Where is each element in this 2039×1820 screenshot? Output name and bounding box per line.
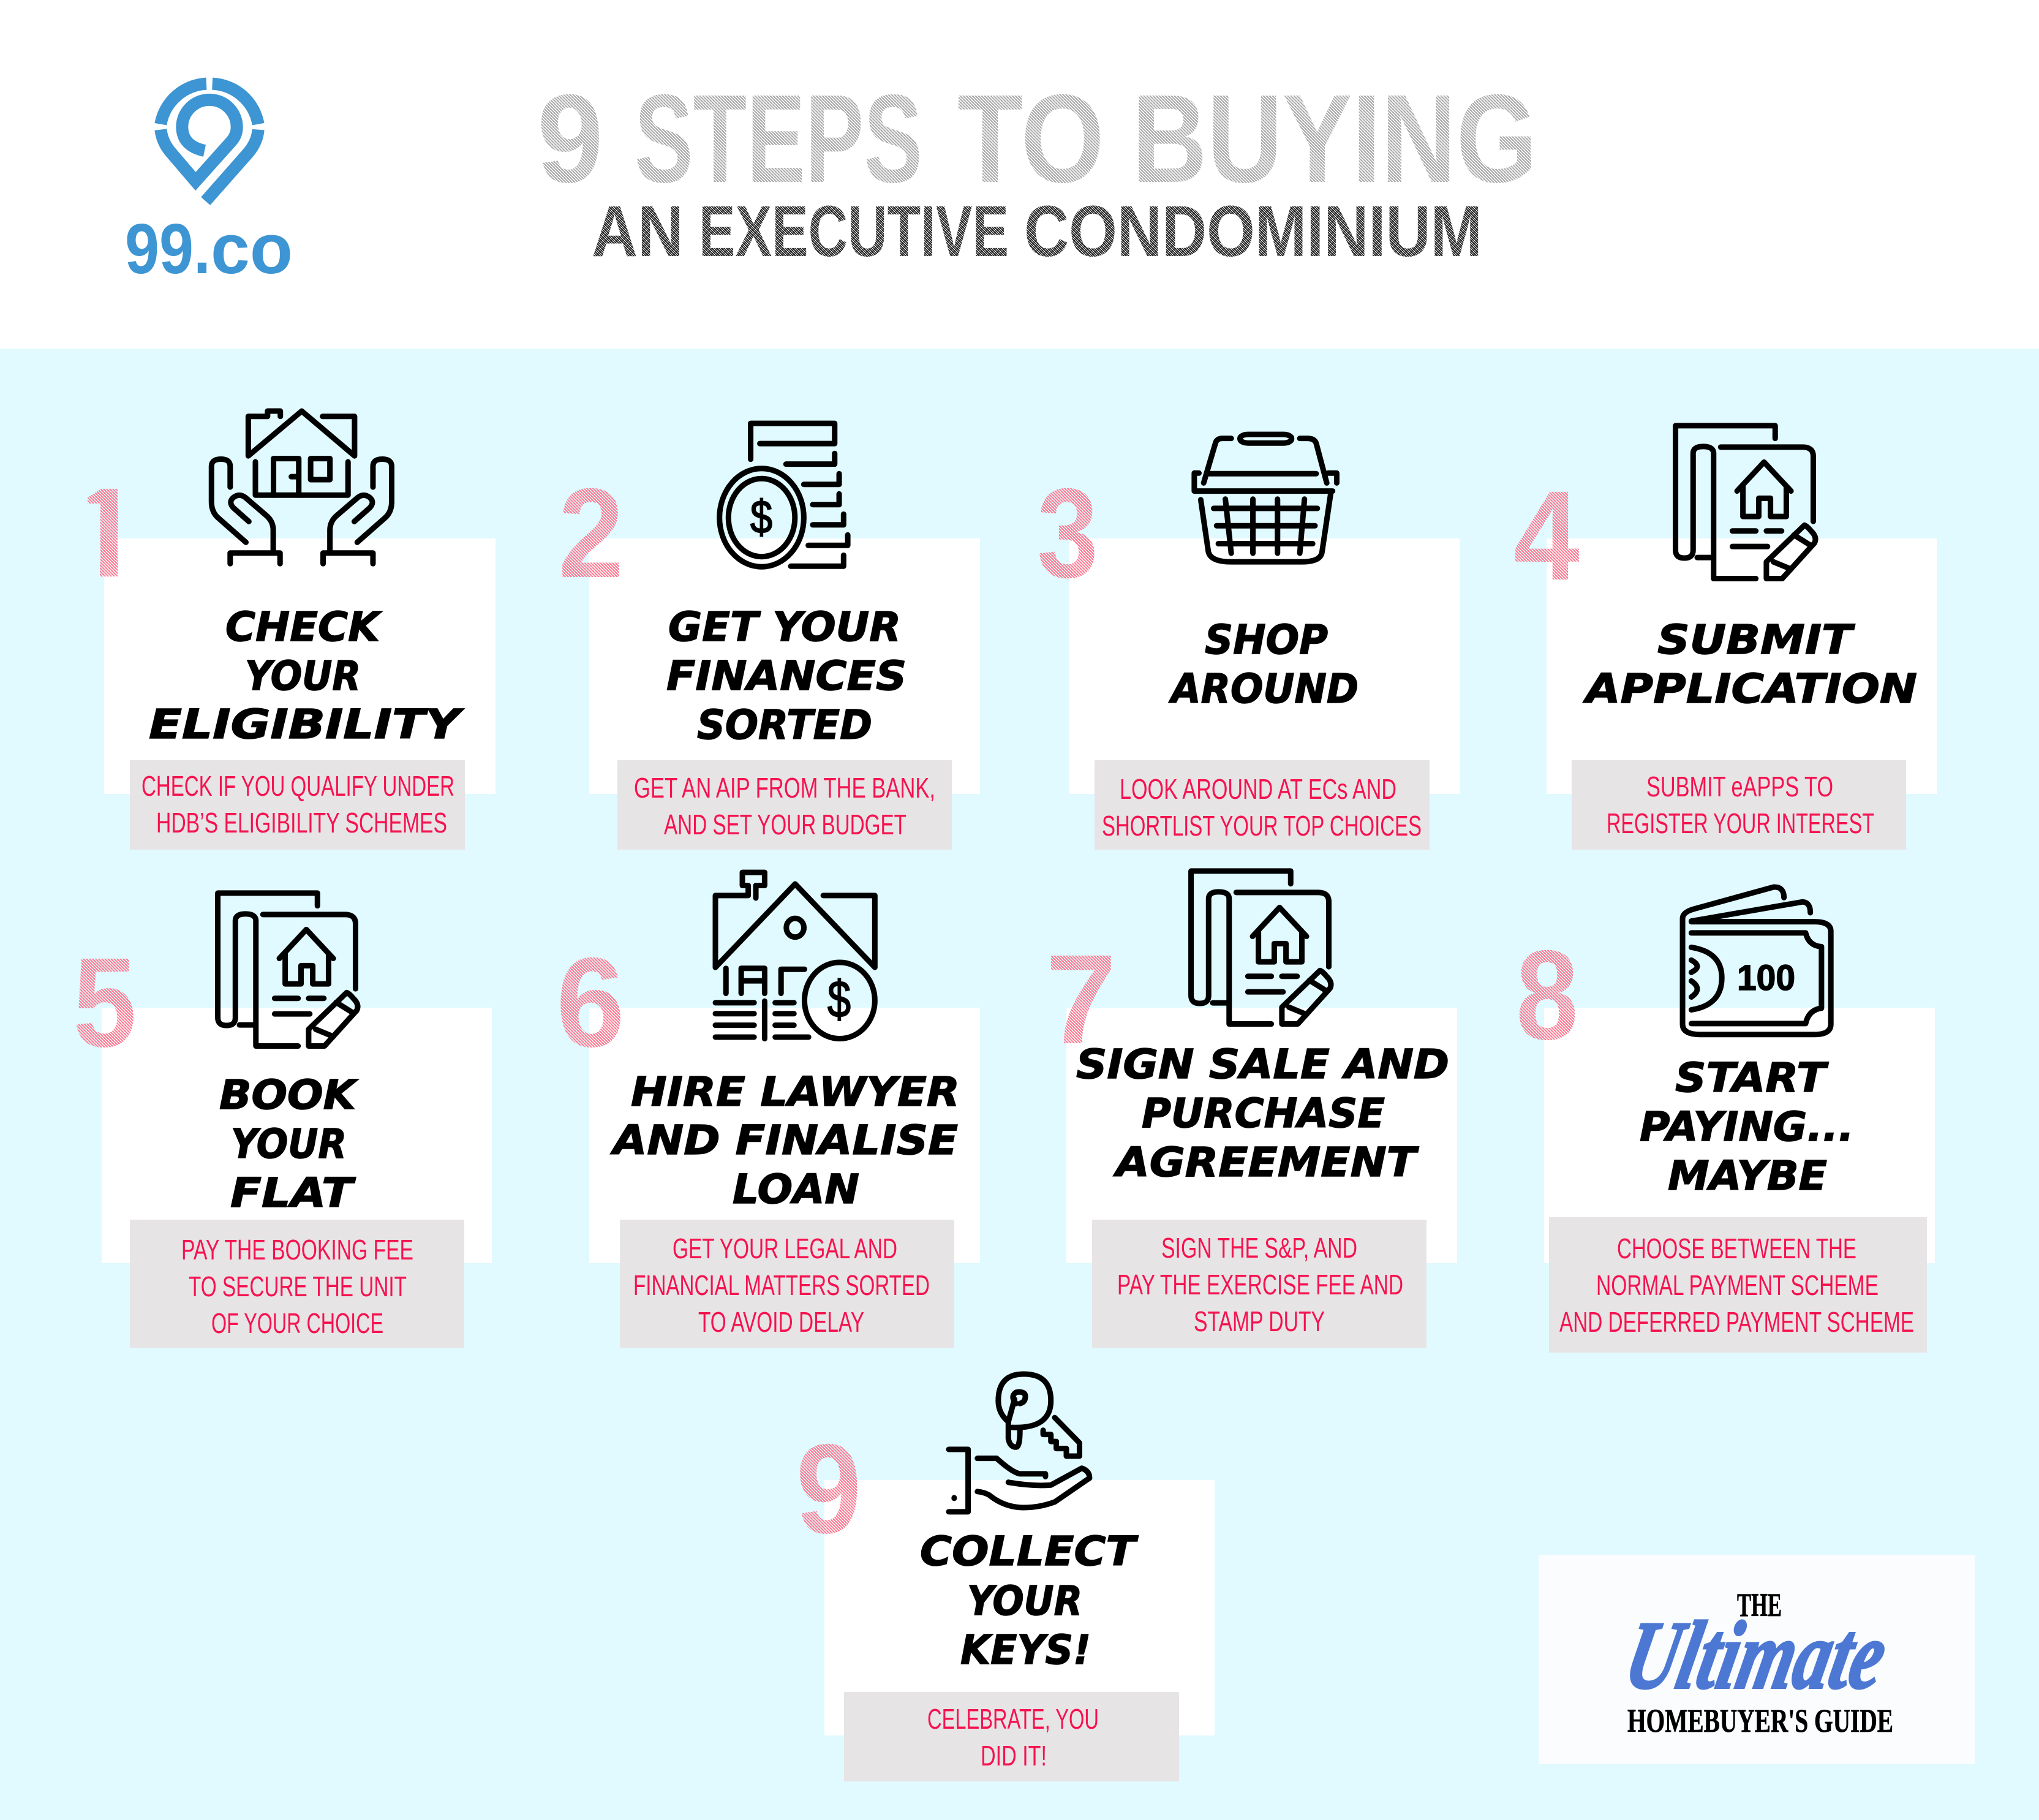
number 1: 1 <box>70 462 141 604</box>
title line 2 <box>592 191 1482 272</box>
title <box>537 69 1537 272</box>
heading <box>1640 1054 1854 1199</box>
heading <box>1582 616 1917 712</box>
description box: SHORTLIST YOUR TOP CHOICES <box>1102 810 1422 842</box>
description box: SIGN THE S&P, AND <box>1161 1232 1357 1264</box>
description box <box>1549 1217 1927 1353</box>
title line 2: EXECUTIVE <box>699 191 1009 272</box>
heading: APPLICATION <box>1582 665 1917 712</box>
number 9: 9 <box>796 1418 861 1560</box>
description box: STAMP DUTY <box>1194 1305 1325 1337</box>
description box <box>130 1220 464 1348</box>
heading: YOUR <box>245 652 361 700</box>
number 2: 2 <box>559 463 624 605</box>
title line 1: 9 <box>537 69 603 209</box>
heading: PURCHASE <box>1142 1090 1385 1137</box>
logo: 99.co <box>125 84 293 289</box>
logo wordmark: co <box>211 209 293 289</box>
heading: SHOP <box>1205 616 1328 663</box>
description box: PAY THE BOOKING FEE <box>181 1234 413 1266</box>
number 3: 3 <box>1037 463 1098 605</box>
description box: PAY THE EXERCISE FEE AND <box>1117 1269 1403 1301</box>
panel: step 1 <box>70 411 496 850</box>
icon: banknote value: 100 <box>1737 958 1795 998</box>
heading: AROUND <box>1168 665 1359 712</box>
number 4: 4 <box>1513 465 1580 607</box>
guide: HOMEBUYER'S GUIDE: HOMEBUYER'S GUIDE <box>1627 1702 1893 1739</box>
number 7: 7 <box>1046 929 1117 1071</box>
icon: banknotes <box>1683 887 1831 1035</box>
icon: document with house and pencil <box>218 893 358 1046</box>
panel: step 9 <box>796 1374 1215 1781</box>
description box: TO SECURE THE UNIT <box>189 1271 407 1302</box>
icon: hand with key <box>949 1374 1090 1512</box>
heading: CHECK <box>225 603 383 651</box>
heading: SORTED <box>697 701 872 749</box>
description box: AND SET YOUR BUDGET <box>664 809 906 840</box>
panel: step 7 <box>1046 871 1457 1348</box>
heading: YOUR <box>231 1120 347 1168</box>
panel: step 8 <box>1516 887 1935 1353</box>
heading: KEYS! <box>960 1626 1091 1674</box>
icon: house with dollar coin <box>715 872 875 1039</box>
description box: AND DEFERRED PAYMENT SCHEME <box>1559 1306 1914 1338</box>
title line 2: CONDOMINIUM <box>1024 191 1482 272</box>
title line 1: STEPS <box>635 69 922 209</box>
description box: OF YOUR CHOICE <box>211 1307 383 1339</box>
panel: step 6 <box>556 872 980 1348</box>
title line 1 <box>537 69 1537 209</box>
panel: step 4 <box>1513 426 1937 850</box>
description box: TO AVOID DELAY <box>698 1306 864 1338</box>
heading: FLAT <box>230 1169 356 1217</box>
title line 1: BUYING <box>1132 69 1537 209</box>
panel: step 3 <box>1037 434 1460 850</box>
title line 2: AN <box>592 191 684 272</box>
heading: AND FINALISE <box>610 1117 958 1164</box>
description box <box>1095 760 1430 850</box>
heading: SIGN SALE AND <box>1076 1041 1449 1088</box>
heading: START <box>1675 1054 1829 1101</box>
heading: ELIGIBILITY <box>149 701 464 748</box>
description box: DID IT! <box>981 1740 1047 1772</box>
description box: GET YOUR LEGAL AND <box>673 1233 897 1264</box>
logo wordmark: 99. <box>125 209 211 289</box>
panel: the ultimate homebuyer's guide <box>1539 1555 1975 1764</box>
heading: MAYBE <box>1668 1152 1827 1199</box>
heading <box>219 1071 359 1217</box>
icon: document with house and pencil <box>1191 871 1331 1024</box>
description box: GET AN AIP FROM THE BANK, <box>634 772 935 804</box>
description box: LOOK AROUND AT ECs AND <box>1120 773 1396 805</box>
description box <box>130 760 465 850</box>
icon: house in hands <box>211 411 391 564</box>
guide: Ultimate: Ultimate <box>1617 1602 1896 1709</box>
heading: AGREEMENT <box>1113 1139 1419 1186</box>
icon: location pin <box>160 84 258 201</box>
heading: SUBMIT <box>1657 616 1856 663</box>
heading <box>610 1068 960 1213</box>
icon: coins and stack <box>720 423 848 567</box>
description box: NORMAL PAYMENT SCHEME <box>1596 1269 1879 1301</box>
description box: REGISTER YOUR INTEREST <box>1607 807 1874 839</box>
heading <box>920 1528 1139 1674</box>
heading <box>666 603 906 749</box>
icon: dollar sign: $ <box>827 970 851 1028</box>
number 8: 8 <box>1516 924 1578 1067</box>
heading: GET YOUR <box>668 603 901 651</box>
heading: LOAN <box>733 1166 859 1213</box>
heading <box>1168 616 1359 712</box>
icon: dollar sign: $ <box>750 491 772 543</box>
description box: CELEBRATE, YOU <box>927 1703 1099 1735</box>
description box <box>1572 760 1906 850</box>
description box: SUBMIT eAPPS TO <box>1646 771 1833 802</box>
heading <box>1076 1041 1449 1186</box>
heading: FINANCES <box>666 652 906 700</box>
description box <box>620 1220 954 1348</box>
guide: THE: THE <box>1737 1587 1782 1623</box>
heading: BOOK <box>219 1071 359 1119</box>
number 6: 6 <box>556 932 625 1074</box>
panel: step 5 <box>73 893 492 1348</box>
description box <box>617 760 952 850</box>
description box: FINANCIAL MATTERS SORTED <box>633 1269 930 1301</box>
description box <box>844 1692 1179 1781</box>
icon: basket <box>1194 434 1336 562</box>
description box <box>1092 1220 1427 1348</box>
heading: HIRE LAWYER <box>631 1068 960 1116</box>
heading <box>149 603 464 748</box>
heading: COLLECT <box>920 1528 1139 1575</box>
panel: step 2 <box>559 423 980 850</box>
icon: document with house and pencil <box>1676 426 1815 579</box>
description box: CHECK IF YOU QUALIFY UNDER <box>141 770 454 802</box>
number 5: 5 <box>73 932 137 1074</box>
description box: CHOOSE BETWEEN THE <box>1617 1233 1856 1264</box>
description box: HDB’S ELIGIBILITY SCHEMES <box>156 807 447 839</box>
title line 1: TO <box>957 69 1104 209</box>
heading: YOUR <box>967 1577 1082 1625</box>
heading: PAYING... <box>1640 1103 1854 1150</box>
